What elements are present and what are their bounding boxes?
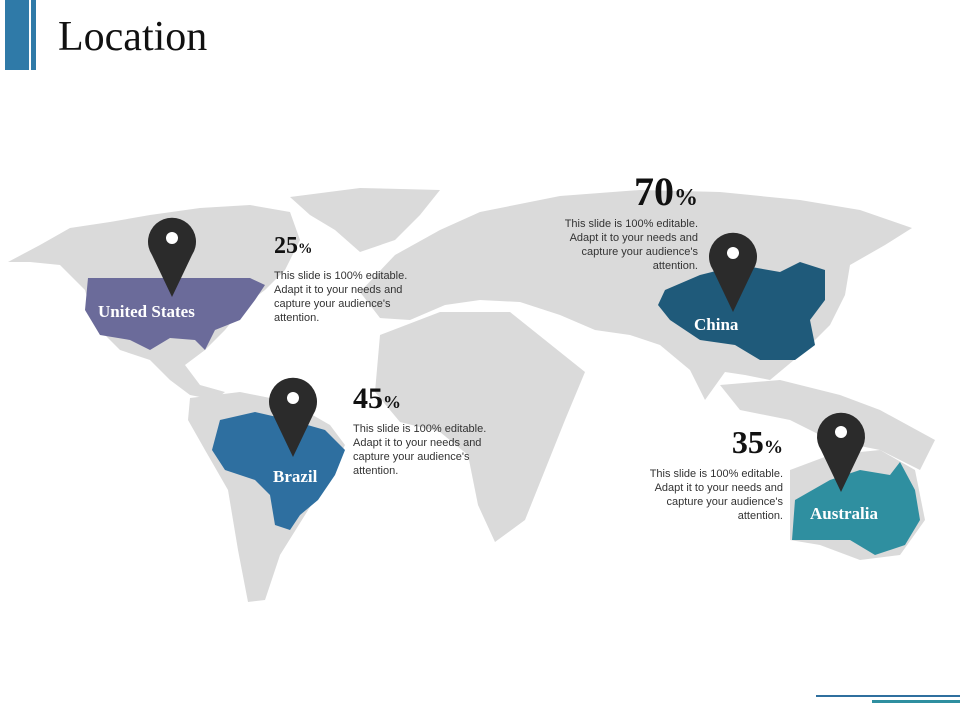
stat: 45% — [353, 382, 486, 477]
stat: 70%: 70% — [634, 169, 698, 214]
country: United States — [85, 278, 265, 350]
footer lines — [816, 695, 960, 697]
pin: Brazil — [269, 378, 317, 457]
stat: 70% — [565, 169, 698, 272]
stat: 35%: 35% — [732, 424, 783, 460]
pin: US — [148, 218, 196, 297]
stat: 25%: This slide is 100% editable. Adapt it to your needs and capture your audience's attention. — [274, 270, 407, 324]
stat: 25% — [274, 233, 407, 324]
country labels: China — [694, 315, 739, 334]
country labels: Australia — [810, 504, 878, 523]
stat: 70%: This slide is 100% editable. Adapt it to your needs and capture your audience's attention. — [565, 218, 698, 272]
country labels: United States — [98, 302, 195, 321]
country: Brazil — [212, 412, 345, 530]
stat: 45%: This slide is 100% editable. Adapt it to your needs and capture your audience's attention. — [353, 423, 486, 477]
title: Location — [58, 14, 207, 60]
country labels — [98, 302, 878, 523]
stat: 25%: 25% — [274, 233, 312, 259]
pin: Australia — [817, 413, 865, 492]
pin: China — [709, 233, 757, 312]
header bar — [5, 0, 36, 70]
stat: 35% — [650, 424, 783, 522]
country: China — [658, 262, 825, 360]
stat: 35%: This slide is 100% editable. Adapt it to your needs and capture your audience's attention. — [650, 468, 783, 522]
country: Australia — [792, 462, 920, 555]
country labels: Brazil — [273, 467, 318, 486]
stat: 45%: 45% — [353, 382, 401, 415]
